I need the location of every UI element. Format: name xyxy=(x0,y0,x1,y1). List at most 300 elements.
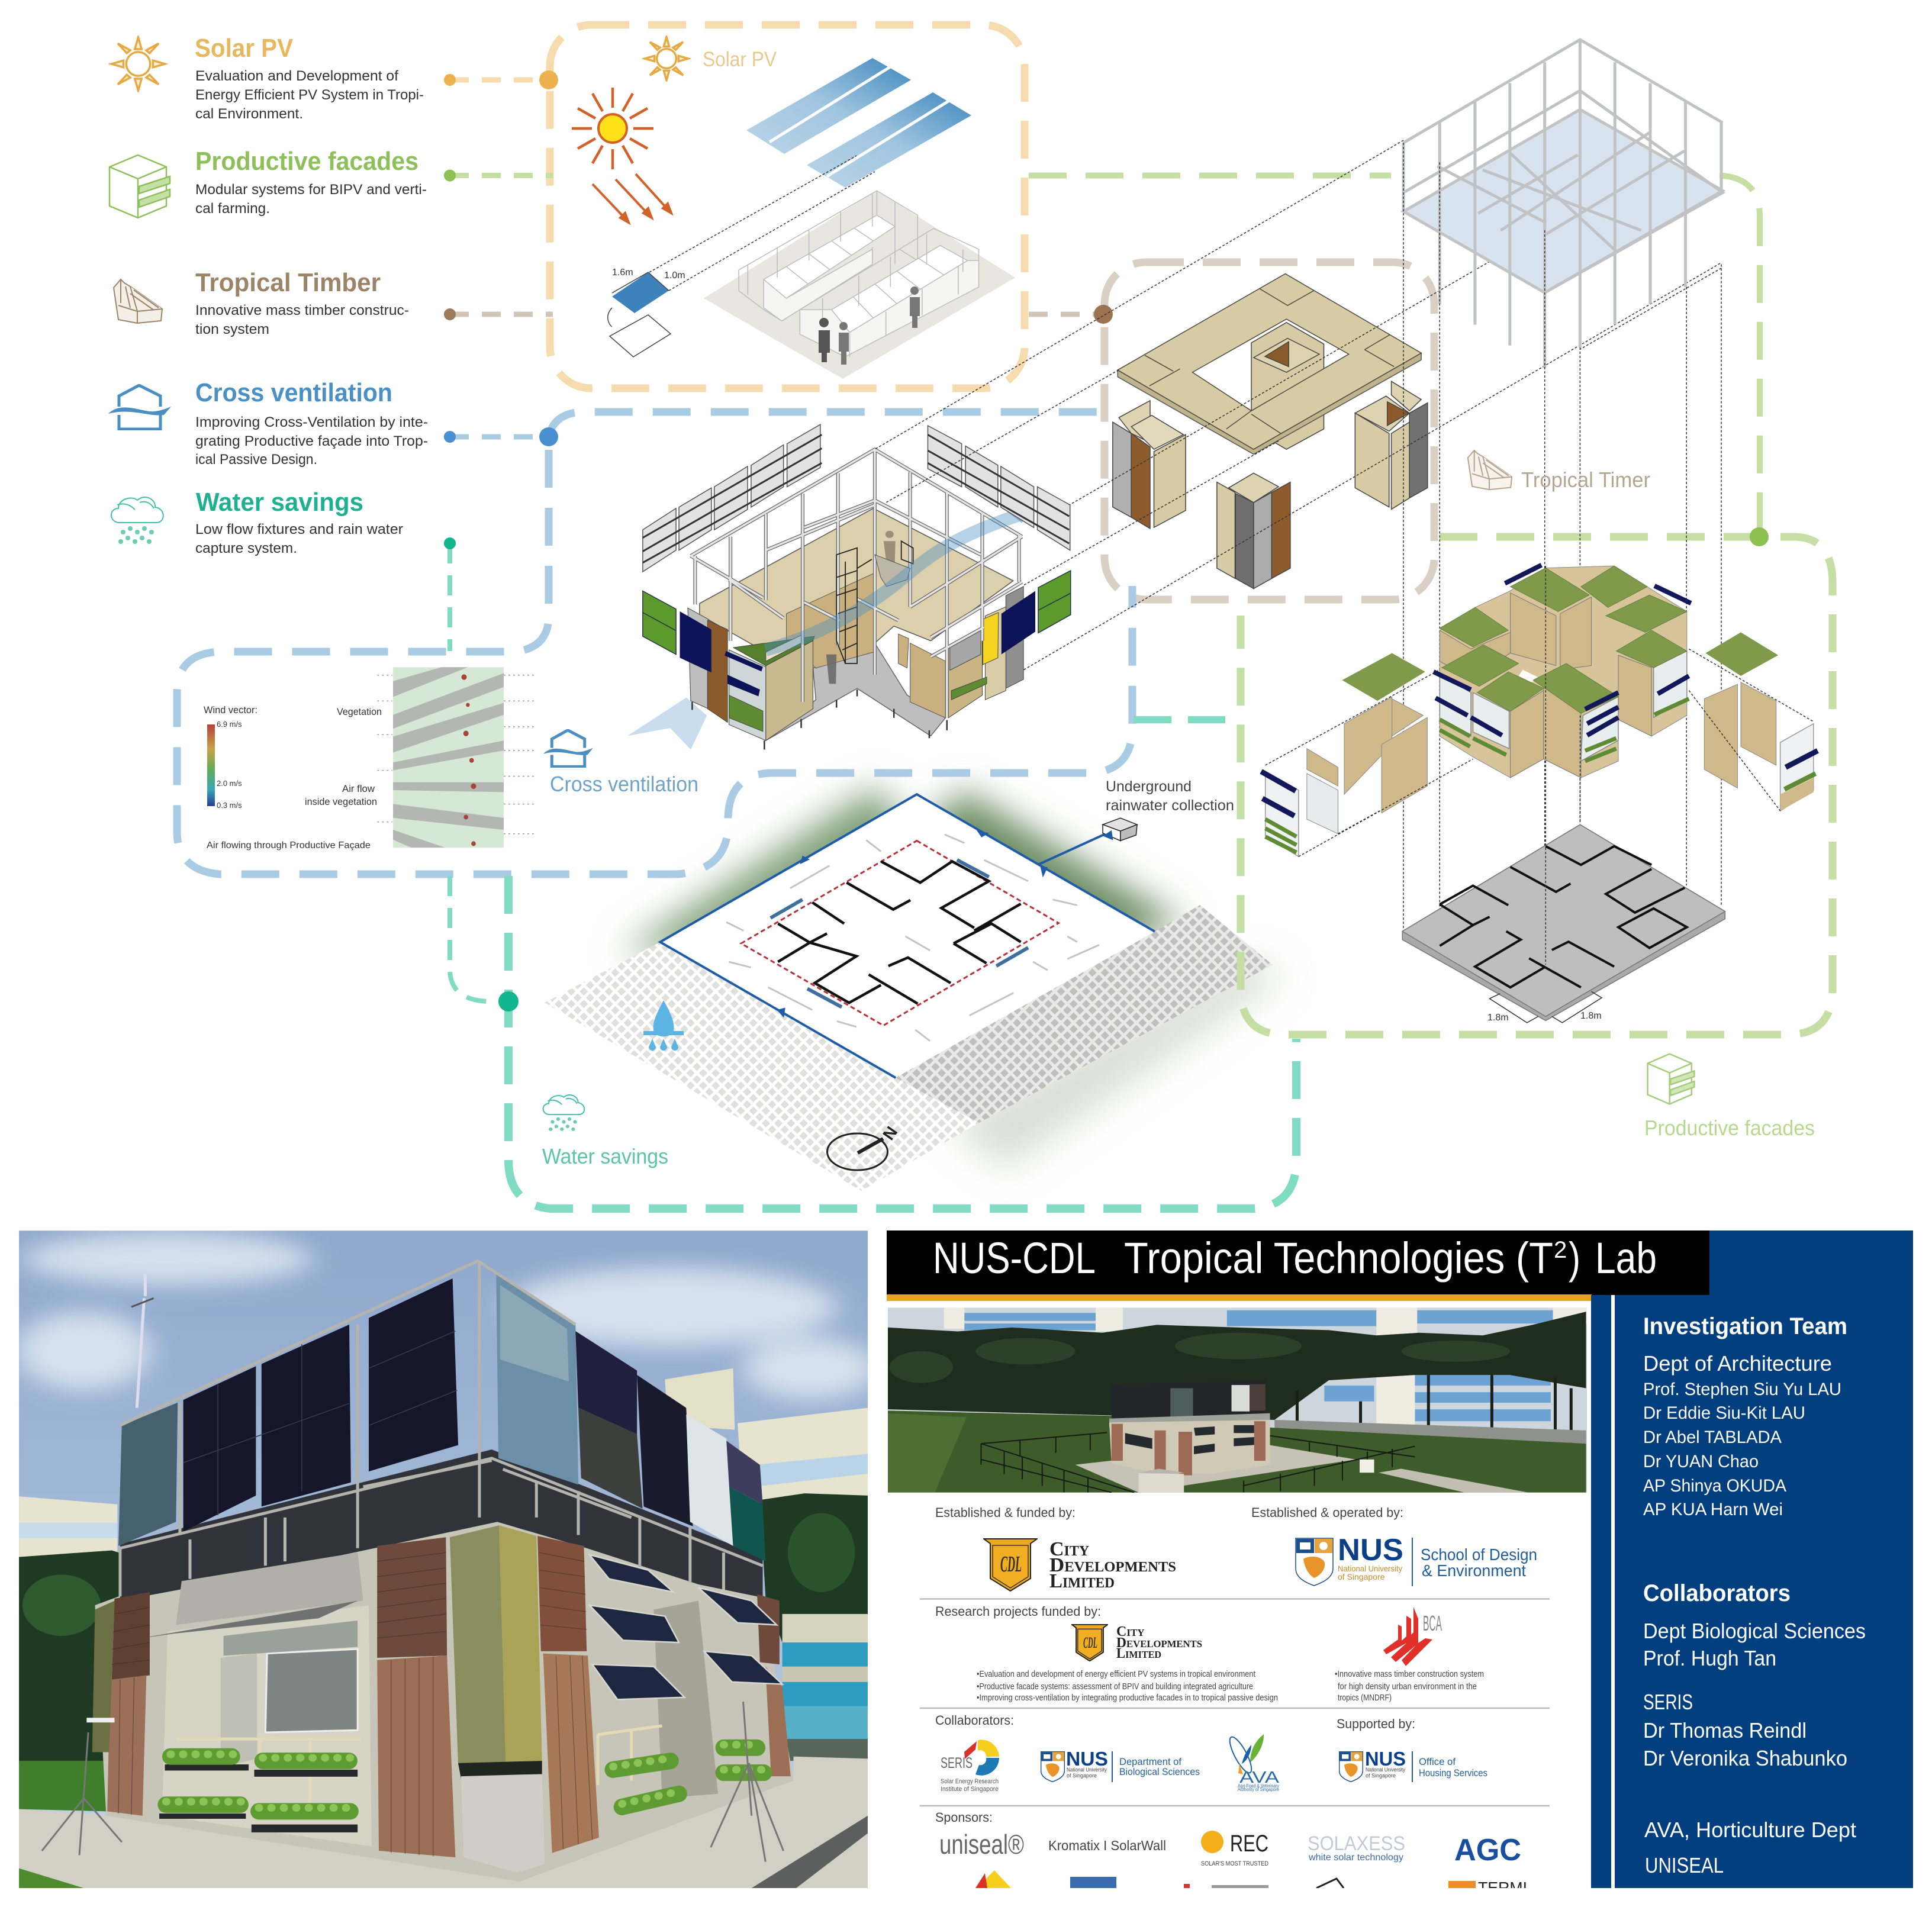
central cluster backing xyxy=(1440,566,1687,778)
navy facade panels xyxy=(680,591,1035,672)
frame members xyxy=(1403,40,1722,368)
description: solar PV: Evaluation and Development of xyxy=(195,68,398,84)
mast xyxy=(131,1274,154,1408)
collaborator list: AVA, Horticulture Dept xyxy=(1644,1818,1856,1842)
interior bench xyxy=(875,555,910,587)
logo: City Developments: Developments xyxy=(1049,1554,1176,1576)
left module door xyxy=(1307,774,1338,834)
ladder racks xyxy=(836,541,913,663)
frame highlights xyxy=(691,449,1022,718)
left block facades xyxy=(688,608,814,740)
description: solar PV xyxy=(195,68,424,122)
right module walls xyxy=(1704,682,1776,788)
PV panels left xyxy=(183,1278,458,1532)
icon: water drop xyxy=(643,1000,684,1051)
left module green roof xyxy=(1342,653,1425,701)
label: 1.8m right: 1.8m xyxy=(1580,1011,1602,1021)
funding and partner logos: BCA xyxy=(1423,1611,1442,1635)
logo: NUS School of Design: of Singapore xyxy=(1338,1572,1385,1581)
colour scale: 2.0 m/s xyxy=(217,779,242,788)
tree canopy highlights xyxy=(890,1333,1510,1383)
icon: sun with rays xyxy=(572,88,653,169)
vegetation label: Vegetation xyxy=(337,706,382,717)
logo: uniseal: uniseal® xyxy=(939,1829,1024,1860)
air flow label: Air flow xyxy=(342,783,375,794)
cropped logos row: TERMI xyxy=(1478,1879,1527,1897)
ring slab xyxy=(1118,274,1421,449)
tree canopy solid xyxy=(888,1312,1586,1420)
pavement xyxy=(1076,1444,1356,1493)
logo: City Developments small: City xyxy=(1116,1624,1145,1639)
legend: tropical timber xyxy=(114,268,409,337)
lettuce highlights xyxy=(166,1745,767,1808)
title text: 2 xyxy=(1554,1237,1567,1263)
label: water savings: Water savings xyxy=(542,1144,668,1168)
logo: NUS Biological Sciences: Department of xyxy=(1119,1756,1181,1767)
greenhouse frames xyxy=(739,191,979,357)
dashed link: productive facades upper xyxy=(1029,175,1760,537)
interior timber walls xyxy=(787,573,945,718)
team list: Dept of Architecture xyxy=(1643,1351,1832,1376)
label: cross ventilation xyxy=(543,730,698,796)
grass xyxy=(888,1410,1586,1493)
timber module isometric xyxy=(1113,274,1428,588)
description: cross ventilation: ical Passive Design. xyxy=(195,452,317,468)
section rules xyxy=(920,1599,1550,1806)
door and windows xyxy=(221,1621,358,1767)
plan details xyxy=(660,794,1155,1078)
logo: NUS Housing Services: of Singapore xyxy=(1366,1773,1396,1779)
wind swoosh head xyxy=(1004,510,1028,523)
logo: Solaxess: SOLAXESS xyxy=(1308,1832,1405,1855)
team list: Prof. Stephen Siu Yu LAU xyxy=(1643,1380,1841,1399)
title text xyxy=(933,1233,1657,1283)
photo: lab on campus xyxy=(888,1307,1594,1493)
left louvre rails xyxy=(643,434,822,563)
description: water savings xyxy=(195,521,403,556)
chart caption: Air flowing through Productive Façade xyxy=(207,840,371,851)
central cluster glazed units xyxy=(1440,651,1687,761)
CDL funded projects list: •Productive facade systems: assessment of BPIV and building integrated agriculture xyxy=(977,1681,1253,1692)
description: water savings: capture system. xyxy=(195,540,297,556)
label: productive facades xyxy=(1644,1054,1815,1140)
heading: water savings: Water savings xyxy=(196,488,363,517)
label: tropical timber: Tropical Timer xyxy=(1521,468,1650,492)
solar panels xyxy=(746,58,971,188)
fence xyxy=(981,1432,1415,1493)
courtyard gap xyxy=(1519,670,1540,682)
logo: SERIS: SERIS xyxy=(941,1755,973,1771)
dashed link: water to ventilation xyxy=(1134,716,1225,723)
description: tropical timber: tion system xyxy=(195,321,269,337)
miniature lab timber xyxy=(1112,1421,1266,1476)
logo: Solaxess: white solar technology xyxy=(1308,1853,1403,1863)
icon: timber xyxy=(114,279,162,323)
label: collaborators: Collaborators: xyxy=(935,1713,1014,1728)
logo: NUS Housing Services: Housing Services xyxy=(1419,1767,1487,1779)
corner glazed timber xyxy=(450,1525,542,1766)
description: productive facades: cal farming. xyxy=(195,201,270,217)
collaborator list: SERIS xyxy=(1643,1690,1693,1714)
steel frame with roof plane xyxy=(1403,40,1722,965)
collaborator list: Dr Veronika Shabunko xyxy=(1643,1746,1847,1770)
title text: ) xyxy=(1569,1233,1580,1283)
label: productive facades: Productive facades xyxy=(1644,1116,1815,1140)
title bar xyxy=(887,1230,1709,1295)
middle column xyxy=(1217,473,1290,588)
logo: NUS Biological Sciences: NUS xyxy=(1066,1748,1108,1770)
wind swoosh xyxy=(766,514,1022,650)
CDL funded projects list: •Improving cross-ventilation by integrating productive facades in to tropical passive design xyxy=(977,1693,1278,1703)
description: tropical timber xyxy=(195,302,409,337)
title text: Tropical Technologies (T xyxy=(1124,1233,1553,1283)
logo: NUS School of Design: & Environment xyxy=(1422,1561,1526,1580)
collaborator list: Dr Thomas Reindl xyxy=(1643,1718,1807,1742)
team list: Dr YUAN Chao xyxy=(1643,1452,1759,1471)
collaborator list: Prof. Hugh Tan xyxy=(1643,1646,1776,1670)
legend: water savings xyxy=(111,488,403,556)
central building isometric: cross ventilation xyxy=(627,424,1071,749)
timber grain xyxy=(112,1552,593,1857)
connectors from legend xyxy=(450,80,1101,437)
module projection lines xyxy=(1266,566,1814,965)
upper frame outline xyxy=(691,449,1022,718)
left module unit xyxy=(1261,771,1299,856)
icon: sun xyxy=(111,37,165,91)
label: established and funded: Established & funded by: xyxy=(935,1505,1076,1520)
logo: NUS Biological Sciences xyxy=(1041,1748,1200,1782)
logo: NUS Housing Services xyxy=(1339,1748,1487,1782)
blurred plan annotations xyxy=(726,835,1099,1041)
pillar right xyxy=(653,1601,718,1798)
icon: small sun xyxy=(645,37,688,80)
legend: cross ventilation xyxy=(108,378,428,468)
tree trunks xyxy=(1297,1375,1571,1470)
label: supported by: Supported by: xyxy=(1337,1716,1415,1731)
CDL funded projects list: •Evaluation and development of energy efficient PV systems in tropical environment xyxy=(977,1669,1256,1679)
CDL funded projects list xyxy=(977,1669,1278,1703)
notice board xyxy=(1360,1460,1374,1473)
collaborator list: UNISEAL xyxy=(1645,1853,1724,1877)
icon: house with wind xyxy=(108,385,171,429)
colour scale: 6.9 m/s xyxy=(217,720,242,729)
white towers xyxy=(944,1307,1589,1425)
label: underground rainwater collection xyxy=(1106,778,1234,814)
description: cross ventilation xyxy=(195,414,428,468)
logo: AVA: AVA xyxy=(1239,1768,1279,1786)
logo: City Developments small: CDL xyxy=(1083,1634,1097,1651)
sky xyxy=(19,1230,868,1888)
photo: T2 lab building xyxy=(17,1230,877,1888)
logo: City Developments: Limited xyxy=(1049,1570,1115,1592)
dashed panel: cross ventilation xyxy=(177,450,1132,874)
hatched ground right xyxy=(896,905,1273,1123)
drain grating xyxy=(752,1816,868,1888)
site plan: rainwater collection xyxy=(545,787,1284,1191)
logo: NUS Biological Sciences: Biological Sciences xyxy=(1119,1766,1200,1777)
grass xyxy=(19,1761,106,1811)
timber right of corner xyxy=(537,1536,599,1853)
lettuce xyxy=(166,1748,764,1811)
description: cross ventilation: Improving Cross-Ventilation by inte- xyxy=(195,414,428,430)
team list: AP Shinya OKUDA xyxy=(1643,1476,1786,1496)
under-deck services xyxy=(120,1449,763,1605)
dashed panel: timber xyxy=(1105,262,1434,600)
label: tropical timber xyxy=(1468,450,1650,492)
label: underground rainwater collection: Underground xyxy=(1106,778,1192,795)
right column xyxy=(1355,381,1428,510)
feet xyxy=(692,690,947,749)
logo: NUS School of Design: National University xyxy=(1338,1564,1402,1573)
building backdrop xyxy=(888,1307,1594,1493)
dashed panel: productive facades xyxy=(1241,537,1833,1035)
wind arrow xyxy=(627,697,707,749)
person silhouettes xyxy=(826,531,896,684)
side panel: team xyxy=(1591,1230,1913,1888)
description: productive facades: Modular systems for BIPV and verti- xyxy=(195,182,427,198)
team list: Dr Abel TABLADA xyxy=(1643,1428,1782,1447)
PV glass left xyxy=(118,1403,178,1546)
CFD facade image xyxy=(377,667,534,848)
right facade xyxy=(587,1561,791,1833)
BCA funded project list: for high density urban environment in the xyxy=(1338,1681,1477,1692)
far right timber xyxy=(757,1594,791,1776)
far right colored buildings xyxy=(783,1614,868,1761)
floor xyxy=(766,643,945,740)
miniature lab lower xyxy=(1109,1420,1270,1474)
glass panel corner xyxy=(496,1274,578,1484)
logo: SERIS: Institute of Singapore xyxy=(941,1786,999,1793)
logo: AVA: Agri-Food & Veterinary xyxy=(1238,1783,1279,1789)
navy background xyxy=(1591,1230,1913,1888)
logo: City Developments xyxy=(984,1538,1176,1592)
left tripod xyxy=(42,1720,122,1855)
label: 1.6m: 1.6m xyxy=(612,268,633,278)
left module walls xyxy=(1307,697,1427,813)
label: 1.0m: 1.0m xyxy=(664,270,685,281)
white plan sheet xyxy=(660,794,1155,1078)
perimeter blue drainage xyxy=(660,794,1155,1078)
long projection lines xyxy=(875,140,1720,670)
building mass xyxy=(95,1518,793,1882)
BCA funded project list xyxy=(1335,1669,1484,1703)
logo: AVA: Authority of Singapore xyxy=(1238,1787,1279,1792)
collaborator list: Dept Biological Sciences xyxy=(1643,1619,1866,1643)
right upper louvres xyxy=(928,426,1070,550)
navy shades cluster xyxy=(1434,565,1691,735)
heading: solar PV: Solar PV xyxy=(195,34,294,63)
sun ray arrows xyxy=(593,174,671,223)
facade markers xyxy=(771,860,1028,1007)
logo: SERIS: Solar Energy Research xyxy=(941,1778,999,1785)
right module unit xyxy=(1780,724,1818,811)
single PV module xyxy=(612,272,669,313)
awning xyxy=(128,1552,363,1640)
centre column xyxy=(1251,323,1324,449)
miniature lab upper PV xyxy=(1112,1380,1266,1419)
logo: REC: SOLAR'S MOST TRUSTED xyxy=(1201,1860,1268,1867)
water tank xyxy=(1103,818,1137,840)
logo: NUS Housing Services: National University xyxy=(1366,1767,1405,1773)
far left timber pier xyxy=(92,1592,150,1816)
label: research projects: Research projects funded by: xyxy=(935,1604,1101,1619)
miniature lab light panels xyxy=(1170,1384,1266,1417)
dashed panel: water savings xyxy=(508,876,1296,1209)
planter trays xyxy=(159,1764,358,1832)
cropped logos row xyxy=(975,1870,1527,1897)
planter rails xyxy=(176,1726,662,1811)
grey site wall xyxy=(1274,1420,1586,1444)
yellow panels xyxy=(983,613,999,665)
colour scale: 0.3 m/s xyxy=(217,801,242,810)
pavement xyxy=(19,1757,868,1888)
description: productive facades xyxy=(195,182,427,217)
PV louvres xyxy=(590,1555,783,1699)
room walls xyxy=(778,861,1021,1004)
icon: rain cloud xyxy=(111,497,163,544)
logo: City Developments: CDL xyxy=(1000,1552,1022,1577)
label: cross ventilation: Cross ventilation xyxy=(550,772,698,796)
slab side xyxy=(1118,353,1421,455)
team list: AP KUA Harn Wei xyxy=(1643,1500,1783,1519)
rooms red dashed outline xyxy=(741,840,1058,1026)
PV panel grid lines xyxy=(183,1331,457,1515)
dimension brackets xyxy=(1490,991,1602,1023)
logo: NUS Biological Sciences: National University xyxy=(1067,1767,1107,1773)
miniature lab deck xyxy=(1109,1413,1270,1428)
dashed link: water savings thin xyxy=(450,543,491,1001)
clouds xyxy=(17,1232,877,1399)
dashed panel: solar PV xyxy=(550,25,1025,388)
logo: NUS School of Design xyxy=(1296,1533,1537,1586)
path xyxy=(1379,1468,1528,1493)
cluster planters xyxy=(1440,699,1689,761)
logo: REC: REC xyxy=(1230,1831,1268,1857)
heading: cross ventilation: Cross ventilation xyxy=(195,378,392,407)
black title background xyxy=(887,1230,1709,1295)
label: underground rainwater collection: rainwater collection xyxy=(1106,797,1234,814)
right block facades xyxy=(948,587,1023,718)
heading: tropical timber: Tropical Timber xyxy=(195,268,381,297)
title text: Lab xyxy=(1595,1233,1657,1283)
central cluster walls xyxy=(1440,593,1651,778)
steel frame xyxy=(120,1261,763,1596)
CFD wind chart xyxy=(204,667,534,851)
roof plane xyxy=(1403,109,1722,292)
logo: City Developments small: Developments xyxy=(1116,1635,1202,1651)
left facade wall xyxy=(162,1605,372,1847)
wind vector label: Wind vector: xyxy=(204,704,257,716)
green facade panels xyxy=(643,571,1071,655)
concrete base xyxy=(461,1774,545,1873)
glass panel shading xyxy=(500,1285,569,1381)
description: solar PV: Energy Efficient PV System in Tropi- xyxy=(195,87,424,103)
background buildings xyxy=(19,1368,868,1561)
BCA funded project list: tropics (MNDRF) xyxy=(1338,1693,1392,1703)
logo: Kromatix SolarWall: Kromatix I SolarWall xyxy=(1048,1838,1166,1853)
logo: City Developments: City xyxy=(1049,1538,1089,1560)
central cluster green roofs xyxy=(1440,566,1687,713)
PV panels right xyxy=(575,1331,765,1561)
logo: NUS School of Design: School of Design xyxy=(1421,1545,1537,1564)
label: established and operated: Established & operated by: xyxy=(1251,1505,1403,1520)
air flow label: inside vegetation xyxy=(305,796,377,807)
logo: AVA xyxy=(1226,1734,1279,1792)
heading: investigation team: Investigation Team xyxy=(1643,1313,1847,1339)
hut xyxy=(1139,1468,1184,1493)
logo: City Developments small xyxy=(1072,1624,1202,1661)
logo: REC xyxy=(1201,1831,1268,1867)
label: water savings xyxy=(542,1095,668,1168)
logo: NUS School of Design: NUS xyxy=(1338,1533,1403,1567)
module dimension lines xyxy=(608,272,671,357)
logo: SERIS xyxy=(941,1740,999,1793)
flow arrows xyxy=(777,830,1113,1018)
description: water savings: Low flow fixtures and rain water xyxy=(195,521,403,537)
floor walls xyxy=(1440,846,1687,987)
logo: Solaxess xyxy=(1308,1832,1405,1863)
logo: AGC: AGC xyxy=(1454,1833,1521,1867)
title text: NUS-CDL xyxy=(933,1233,1096,1283)
black band xyxy=(458,1761,542,1779)
connector dots xyxy=(444,70,1769,1012)
projection lines xyxy=(649,156,875,291)
trees xyxy=(19,1493,868,1763)
north compass xyxy=(827,1123,901,1170)
solar PV panel contents xyxy=(572,37,1015,379)
timber left of corner xyxy=(377,1537,455,1857)
right louvre rails xyxy=(928,434,1069,543)
logo: BCA xyxy=(1383,1607,1442,1666)
people xyxy=(819,286,920,365)
slab joints xyxy=(1145,288,1394,433)
legend: productive facades xyxy=(110,147,427,218)
description: cross ventilation: grating Productive façade into Trop- xyxy=(195,433,428,449)
heading: collaborators: Collaborators xyxy=(1643,1580,1791,1606)
productive facade modules xyxy=(1261,565,1818,1023)
colour scale xyxy=(207,720,242,810)
logo: NUS Biological Sciences: of Singapore xyxy=(1067,1773,1097,1779)
window shades xyxy=(724,651,982,696)
heading: productive facades: Productive facades xyxy=(195,147,418,176)
label: 1.8m left: 1.8m xyxy=(1487,1013,1509,1023)
label: sponsors: Sponsors: xyxy=(935,1810,993,1825)
funding and partner logos xyxy=(920,1505,1550,1897)
label: solar PV: Solar PV xyxy=(703,48,777,71)
logo: City Developments small: Limited xyxy=(1116,1646,1161,1661)
right tripod xyxy=(711,1702,783,1862)
timber slabs xyxy=(700,508,1013,668)
greenhouse platform xyxy=(704,191,1015,379)
white stripe xyxy=(1611,1295,1615,1888)
logo: NUS Housing Services: NUS xyxy=(1365,1748,1406,1770)
miniature lab louvres xyxy=(1125,1425,1254,1454)
right module green roof xyxy=(1705,632,1778,676)
icon: facade cube xyxy=(110,155,170,218)
orange rule xyxy=(887,1294,1592,1301)
foreground grass xyxy=(19,1869,84,1888)
legend: solar PV xyxy=(111,34,424,122)
logo: NUS Housing Services: Office of xyxy=(1419,1756,1456,1767)
vertical projection lines xyxy=(1403,143,1721,965)
air flow label xyxy=(305,783,377,807)
left upper louvres xyxy=(643,424,820,572)
dashed link: cross ventilation top edge xyxy=(549,412,1100,437)
grass shade xyxy=(888,1413,967,1493)
BCA funded project list: •Innovative mass timber construction system xyxy=(1335,1669,1484,1679)
blue balcony bands xyxy=(964,1310,1553,1421)
green glow behind site xyxy=(622,787,1284,1169)
